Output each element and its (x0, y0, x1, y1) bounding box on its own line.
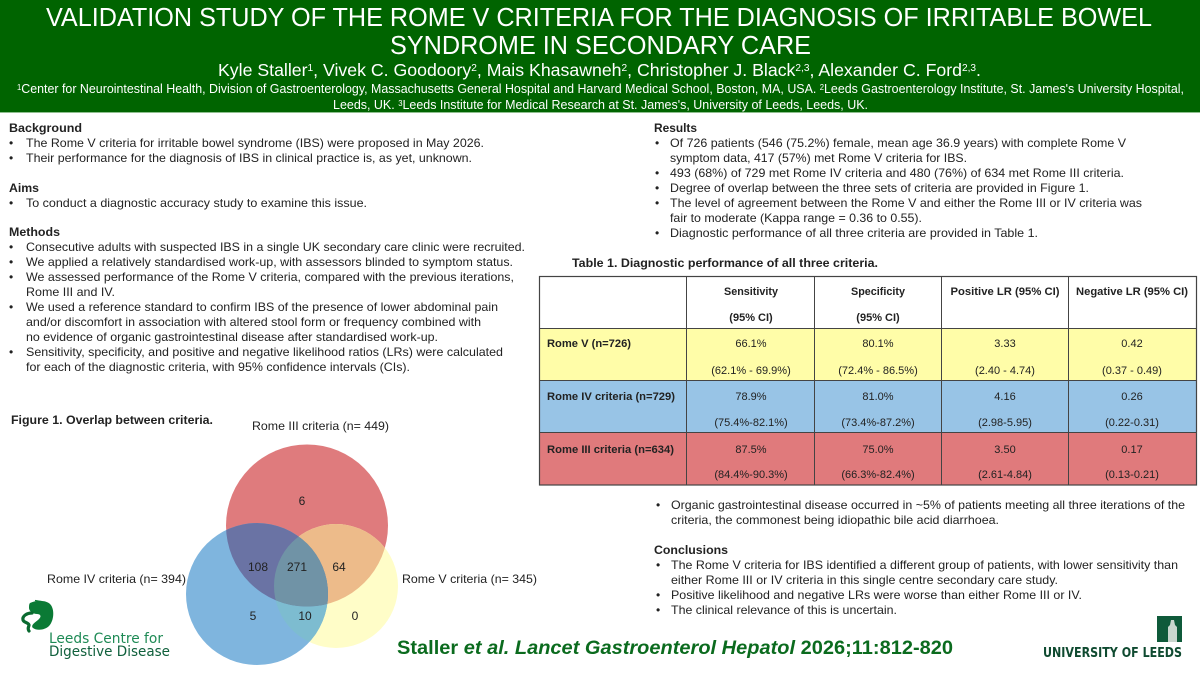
authors: , Mais Khasawneh (477, 60, 622, 80)
region counts: 10 (298, 609, 312, 623)
row: Rome III (547, 444, 1159, 481)
panel: methods: Methods (9, 225, 60, 239)
panel: background (9, 121, 484, 165)
row: Rome V: (0.37 - 0.49) (1102, 365, 1162, 377)
panel: methods: • (9, 270, 13, 284)
venn diagram (47, 419, 537, 665)
region counts: 0 (352, 609, 359, 623)
row: Rome III: 0.17 (1121, 444, 1143, 456)
grid lines (539, 276, 1197, 485)
row: Rome V: (2.40 - 4.74) (975, 365, 1035, 377)
panel: aims: To conduct a diagnostic accuracy study to examine this issue. (26, 196, 367, 210)
authors: , Alexander C. Ford (809, 60, 962, 80)
table heading: Table 1. Diagnostic performance of all three criteria. (572, 256, 878, 270)
authors: 2 (622, 63, 628, 74)
overlap: Rome III and Rome IV (226, 523, 328, 606)
panel: results: symptom data, 417 (57%) met Rome V criteria for IBS. (670, 151, 967, 165)
row: Rome III: 75.0% (862, 444, 894, 456)
row: Rome III: 87.5% (735, 444, 767, 456)
affiliations: 3 (398, 99, 403, 108)
panel: conclusions: The Rome V criteria for IBS identified a different group of patients, with lower sensitivity than (671, 558, 1178, 572)
region counts: 108 (248, 560, 268, 574)
panel: conclusions (654, 543, 1178, 617)
row: Rome IV: Rome IV criteria (n=729) (547, 391, 675, 403)
row: Rome III: (0.13-0.21) (1105, 469, 1159, 481)
panel: conclusions: The clinical relevance of this is uncertain. (671, 603, 897, 617)
panel: methods: • (9, 240, 13, 254)
panel: background: Their performance for the diagnosis of IBS in clinical practice is, as yet, unknown. (26, 151, 472, 165)
row: Rome IV: (73.4%-87.2%) (841, 417, 915, 429)
figure heading: Figure 1. Overlap between criteria. (11, 413, 213, 427)
panel: methods: Rome III and IV. (26, 285, 115, 299)
region counts: 5 (250, 609, 257, 623)
panel: conclusions: • (656, 558, 660, 572)
row: Rome IV: 0.26 (1121, 391, 1143, 403)
circle: Rome III (226, 444, 388, 606)
panel: results: Results (654, 121, 697, 135)
header row: Negative LR (95% CI) (1076, 286, 1188, 298)
panel: aims: Aims (9, 181, 39, 195)
panel: aims (9, 181, 367, 210)
panel: methods: We applied a relatively standardised work-up, with assessors blinded to symptom status. (26, 255, 513, 269)
panel: results: • (655, 181, 659, 195)
row: Rome III: (2.61-4.84) (978, 469, 1032, 481)
panel: methods: Sensitivity, specificity, and positive and negative likelihood ratios (LRs) were calculated (26, 345, 503, 359)
row: Rome III: Rome III criteria (n=634) (547, 444, 674, 456)
circle: Rome V (274, 524, 398, 648)
affiliations: Leeds, UK. (333, 97, 397, 112)
affiliations: 1 (17, 83, 22, 92)
header row: (95% CI) (856, 312, 900, 324)
row: Rome IV: 78.9% (735, 391, 767, 403)
logo: Leeds Centre for Digestive Disease (23, 600, 170, 660)
panel: methods: • (9, 300, 13, 314)
panel: methods: We used a reference standard to confirm IBS of the presence of lower abdominal pain (26, 300, 498, 314)
title (46, 2, 1152, 60)
results note: • (656, 498, 660, 512)
row: Rome V: 3.33 (994, 338, 1016, 350)
row: Rome III: (84.4%-90.3%) (714, 469, 788, 481)
panel: background: Background (9, 121, 82, 135)
row: Rome IV: 4.16 (994, 391, 1016, 403)
panel: results: The level of agreement between the Rome V and either the Rome III or IV criteria was (670, 196, 1142, 210)
region counts: 6 (299, 494, 306, 508)
panel: results: • (655, 226, 659, 240)
row: Rome V: Rome V (n=726) (547, 338, 631, 350)
row: Rome V (547, 338, 1162, 377)
results note: criteria, the commonest being idiopathic bile acid diarrhoea. (671, 513, 999, 527)
header row: Sensitivity (724, 286, 779, 298)
panel: results: • (655, 196, 659, 210)
authors: 1 (308, 63, 314, 74)
authors: Kyle Staller (218, 60, 307, 80)
panel: background: • (9, 136, 13, 150)
panel: background: The Rome V criteria for irritable bowel syndrome (IBS) were proposed in May 2026. (26, 136, 484, 150)
panel: conclusions: Conclusions (654, 543, 728, 557)
icon: Parkinson building tower (1157, 616, 1182, 642)
panel: methods (9, 225, 525, 374)
header row (724, 286, 1188, 324)
results note: Organic gastrointestinal disease occurred in ~5% of patients meeting all three iterations of the (671, 498, 1185, 512)
row: Rome V: (62.1% - 69.9%) (711, 365, 791, 377)
panel: methods: • (9, 345, 13, 359)
authors: , Christopher J. Black (627, 60, 796, 80)
panel: results: • (655, 166, 659, 180)
label: Rome IV: Rome IV criteria (n= 394) (47, 572, 186, 586)
header row: (95% CI) (729, 312, 773, 324)
panel: methods: Consecutive adults with suspected IBS in a single UK secondary care clinic were recruited. (26, 240, 525, 254)
affiliations: Center for Neurointestinal Health, Division of Gastroenterology, Massachusetts General Hospital and Harvard Medical School, Boston, MA, USA. (21, 81, 820, 96)
panel: results: Diagnostic performance of all three criteria are provided in Table 1. (670, 226, 1038, 240)
authors: 2,3 (795, 63, 810, 74)
row: Rome IV (547, 391, 1159, 429)
panel: results: Of 726 patients (546 (75.2%) female, mean age 36.9 years) with complete Rome V (670, 136, 1126, 150)
logo: Leeds Centre for Digestive Disease: Leeds Centre for (49, 631, 163, 647)
header row: Specificity (851, 286, 906, 298)
label: Rome III: Rome III criteria (n= 449) (252, 419, 389, 433)
panel: aims: • (9, 196, 13, 210)
panel: methods: no evidence of organic gastrointestinal disease after standardised work-up. (26, 330, 438, 344)
icon: apple and gut (23, 600, 53, 631)
panel: results (654, 121, 1142, 240)
authors: . (976, 60, 981, 80)
panel: conclusions: • (656, 588, 660, 602)
header banner (0, 0, 1200, 113)
authors: 2 (471, 63, 477, 74)
panel: methods: for each of the diagnostic criteria, with 95% confidence intervals (CIs). (26, 360, 410, 374)
panel: methods: • (9, 255, 13, 269)
circle: Rome IV (186, 523, 328, 665)
results note (656, 498, 1185, 527)
panel: results: Degree of overlap between the three sets of criteria are provided in Figure 1. (670, 181, 1089, 195)
region counts: 271 (287, 560, 307, 574)
citation: Staller et al. Lancet Gastroenterol Hepatol 2026;11:812-820 (397, 638, 953, 659)
panel: conclusions: either Rome III or IV criteria in this single centre secondary care study. (671, 573, 1058, 587)
panel: conclusions: Positive likelihood and negative LRs were worse than either Rome III or IV. (671, 588, 1082, 602)
row: Rome IV: (2.98-5.95) (978, 417, 1032, 429)
authors: , Vivek C. Goodoory (313, 60, 472, 80)
row: Rome III: 3.50 (994, 444, 1016, 456)
row: Rome V: 0.42 (1121, 338, 1143, 350)
label: Rome V: Rome V criteria (n= 345) (402, 572, 537, 586)
overlap: Rome III and Rome V (299, 524, 385, 604)
panel: results: • (655, 136, 659, 150)
logo: University of Leeds (1043, 616, 1182, 661)
affiliations (17, 81, 1184, 112)
authors: 2,3 (962, 63, 977, 74)
logo: Leeds Centre for Digestive Disease: Digestive Disease (49, 644, 170, 660)
overlap: all three (274, 536, 328, 606)
panel: methods: and/or discomfort in association with altered stool form or frequency combined with (26, 315, 481, 329)
row backgrounds (539, 276, 1196, 485)
row: Rome IV: 81.0% (862, 391, 894, 403)
affiliations: Leeds Institute for Medical Research at St. James's, University of Leeds, Leeds, UK. (402, 97, 868, 112)
panel: conclusions: • (656, 603, 660, 617)
row: Rome V: 80.1% (862, 338, 894, 350)
table: diagnostic performance (539, 276, 1197, 485)
row: Rome IV: (75.4%-82.1%) (714, 417, 788, 429)
panel: results: fair to moderate (Kappa range = 0.36 to 0.55). (670, 211, 922, 225)
region counts: 64 (332, 560, 346, 574)
row: Rome V: 66.1% (735, 338, 767, 350)
row: Rome V: (72.4% - 86.5%) (838, 365, 918, 377)
title: SYNDROME IN SECONDARY CARE (390, 30, 811, 60)
header row: Positive LR (95% CI) (950, 286, 1060, 298)
title: VALIDATION STUDY OF THE ROME V CRITERIA FOR THE DIAGNOSIS OF IRRITABLE BOWEL (46, 2, 1152, 32)
panel: results: 493 (68%) of 729 met Rome IV criteria and 480 (76%) of 634 met Rome III criteria. (670, 166, 1124, 180)
row: Rome IV: (0.22-0.31) (1105, 417, 1159, 429)
affiliations: Leeds Gastroenterology Institute, St. James's University Hospital, (824, 81, 1184, 96)
affiliations: 2 (820, 83, 825, 92)
region counts (248, 494, 359, 623)
row: Rome III: (66.3%-82.4%) (841, 469, 915, 481)
overlap: Rome IV and Rome V (276, 536, 328, 642)
panel: background: • (9, 151, 13, 165)
panel: methods: We assessed performance of the Rome V criteria, compared with the previous iterations, (26, 270, 514, 284)
